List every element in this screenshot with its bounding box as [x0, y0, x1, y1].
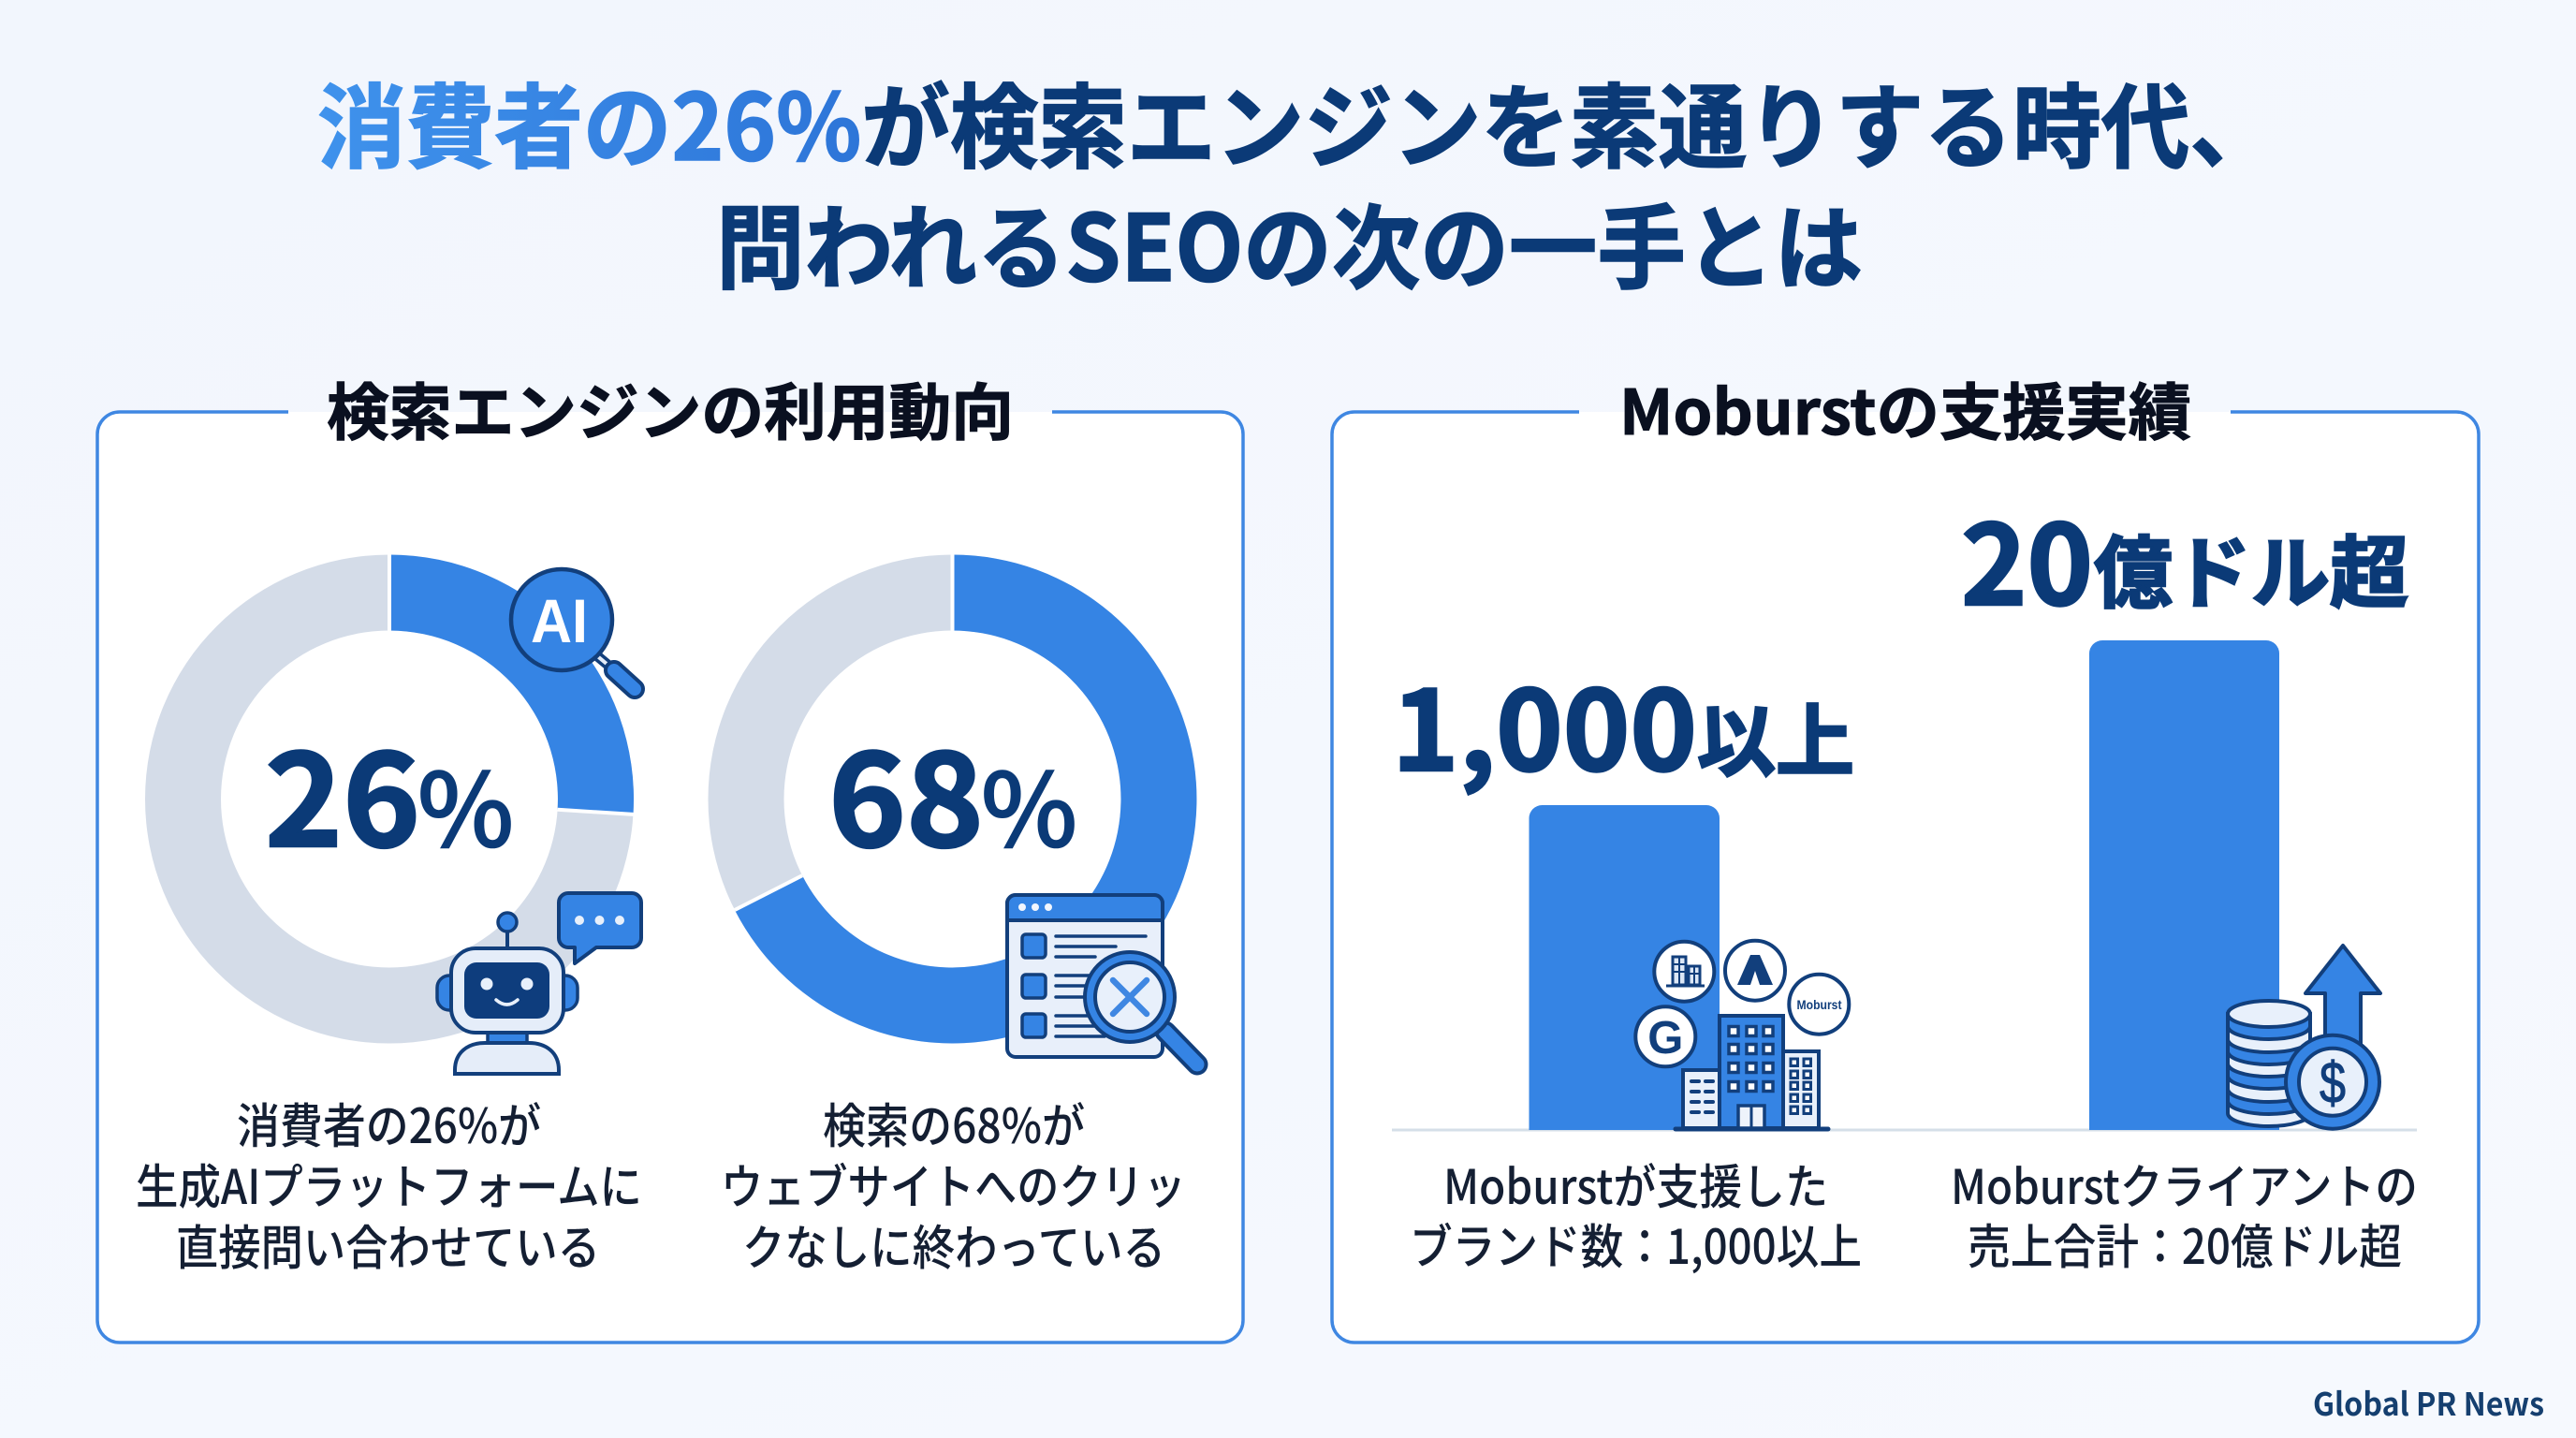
icon: brand logos and buildings — [1635, 941, 1849, 1129]
donut chart: 26% — [145, 554, 634, 1043]
caption: client revenue — [1951, 1149, 2418, 1278]
value: 1,000以上: 以上 — [1697, 680, 1854, 793]
caption: client revenue: Moburstクライアントの — [1951, 1149, 2418, 1218]
donut chart: 68% — [708, 554, 1196, 1043]
caption: supported brands: ブランド数：1,000以上 — [1410, 1209, 1862, 1278]
title: 問われるSEOの次の一手とは — [716, 175, 1863, 308]
value: 26%: 26 — [265, 699, 420, 884]
heading: Moburst track record: Moburstの支援実績 — [1619, 363, 2191, 453]
caption: 26%: 消費者の26%が — [237, 1088, 541, 1157]
heading: search engine usage: 検索エンジンの利用動向 — [327, 363, 1014, 453]
panel: Moburst track record — [1332, 363, 2479, 1343]
bar: 2 billion dollars — [2089, 640, 2279, 1130]
source credit: Global PR News — [2313, 1379, 2544, 1425]
caption: supported brands: Moburstが支援した — [1443, 1149, 1828, 1218]
title — [317, 54, 2278, 308]
value: 1,000以上 — [1392, 642, 1854, 802]
value: 20億ドル超: 億ドル超 — [2094, 511, 2408, 624]
icon: coins, dollar and up arrow — [2228, 946, 2380, 1129]
value: 68% — [828, 699, 1077, 884]
caption: 68%: クなしに終わっている — [742, 1210, 1165, 1279]
caption: 26%: 生成AIプラットフォームに — [136, 1149, 642, 1218]
value: 1,000以上: 1,000 — [1392, 642, 1697, 802]
value: 20億ドル超 — [1961, 477, 2408, 637]
bar: 1,000 brands — [1530, 805, 1720, 1130]
value: 68%: % — [981, 730, 1077, 876]
caption: 68%: ウェブサイトへのクリッ — [721, 1149, 1186, 1218]
icon: brand logos and buildings: Moburst — [1797, 997, 1842, 1012]
baseline axis — [1392, 1129, 2417, 1131]
caption: 68% — [721, 1088, 1186, 1279]
panel: search engine usage — [97, 363, 1243, 1343]
icon: brand logos and buildings: G — [1647, 1013, 1683, 1064]
caption: 26% — [136, 1088, 642, 1279]
value: 68%: 68 — [828, 699, 984, 884]
icon: AI magnifier: AI — [531, 586, 588, 655]
caption: supported brands — [1410, 1149, 1862, 1278]
icon: browser with no-click magnifier — [1007, 895, 1197, 1064]
value: 26%: % — [417, 730, 514, 876]
title: 消費者の26%が検索エンジンを素通りする時代、 — [317, 54, 2278, 187]
value: 20億ドル超: 20 — [1961, 477, 2093, 637]
value: 26% — [265, 699, 514, 884]
caption: client revenue: 売上合計：20億ドル超 — [1968, 1209, 2402, 1278]
icon: coins, dollar and up arrow: $ — [2320, 1051, 2346, 1116]
icon: robot with speech bubble — [437, 893, 641, 1074]
icon: AI magnifier — [511, 569, 635, 689]
caption: 26%: 直接問い合わせている — [176, 1210, 600, 1279]
caption: 68%: 検索の68%が — [823, 1088, 1085, 1157]
